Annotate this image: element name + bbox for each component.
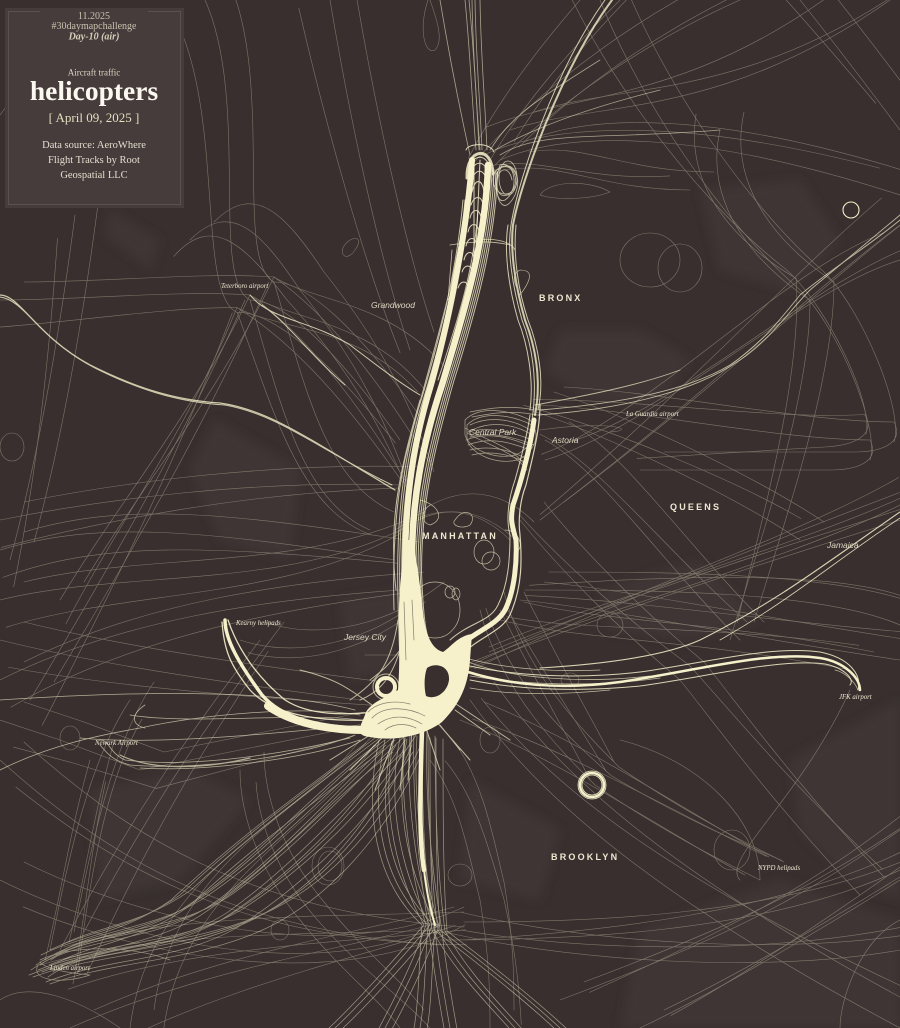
- Hudson corridor: [393, 160, 498, 700]
- Central Park helicopter loops: [465, 407, 537, 470]
- Kearny arm: [222, 620, 385, 730]
- label: Manhattan: MANHATTAN: [422, 531, 498, 541]
- circle track in Brooklyn: [578, 771, 606, 799]
- label: Queens: QUEENS: [670, 502, 721, 512]
- data source: Data source: AeroWhere: [42, 140, 146, 151]
- south trunk: [420, 730, 435, 925]
- panel inner border: [8, 12, 180, 204]
- label: NYPD helipads: NYPD helipads: [757, 865, 800, 872]
- Battery hub: [300, 540, 510, 790]
- label: Newark Airport: Newark Airport: [94, 740, 139, 747]
- label: Astoria: Astoria: [551, 435, 579, 445]
- JFK arm: [465, 650, 860, 694]
- Midtown loops: [410, 500, 520, 638]
- Upper Manhattan loops: [448, 161, 518, 300]
- data source: [42, 140, 146, 181]
- north approach bundle: [440, 0, 720, 155]
- label: Central Park: Central Park: [469, 427, 517, 437]
- land texture: [90, 180, 900, 1028]
- south fan bundle: [329, 730, 567, 1028]
- data source: Geospatial LLC: [60, 170, 128, 181]
- 125th street turnaround: [458, 145, 494, 288]
- data source: Flight Tracks by Root: [48, 155, 140, 166]
- Newark west bundle: [0, 693, 360, 770]
- Jamaica corridor: [540, 512, 900, 668]
- challenge heading: #30daymapchallenge: [52, 21, 137, 32]
- label: Brooklyn: BROOKLYN: [551, 852, 619, 862]
- label: Kearny helipads: Kearny helipads: [235, 620, 281, 627]
- place labels: [49, 283, 873, 972]
- Teterboro route: [0, 295, 420, 490]
- label: Jersey City: Jersey City: [343, 632, 387, 642]
- East River north route: [506, 0, 612, 420]
- challenge heading: [40, 8, 148, 42]
- challenge heading: Day-10 (air): [68, 32, 119, 42]
- date: [ April 09, 2025 ]: [49, 110, 139, 125]
- label: Bronx: BRONX: [539, 293, 583, 303]
- title: helicopters: [30, 75, 158, 106]
- challenge heading: 11.2025: [78, 11, 110, 22]
- label: Linden airport: Linden airport: [49, 965, 91, 972]
- East River south route: [450, 405, 540, 655]
- small circle track in Queens: [843, 202, 859, 218]
- label: Teterboro airport: Teterboro airport: [221, 283, 269, 290]
- label: La Guardia airport: La Guardia airport: [625, 411, 680, 418]
- label: Grandwood: Grandwood: [371, 300, 415, 310]
- loops: [620, 233, 680, 287]
- info panel: [5, 8, 184, 208]
- La Guardia and northeast route: [535, 215, 900, 415]
- southwest bundle to Linden: [29, 733, 423, 984]
- label: Jamaica: Jamaica: [826, 540, 859, 550]
- subtitle: Aircraft traffic: [68, 68, 120, 78]
- label: JFK airport: JFK airport: [839, 694, 873, 701]
- panel background: [5, 8, 184, 208]
